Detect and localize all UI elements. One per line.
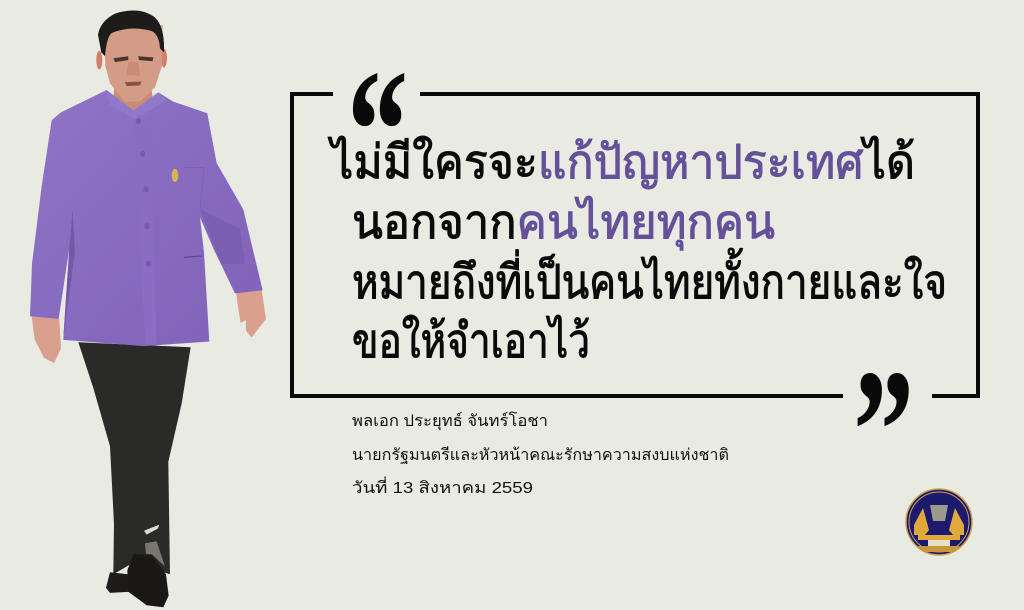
icon: government seal <box>906 489 972 555</box>
trousers and shoes <box>78 342 191 607</box>
jacket <box>30 90 263 346</box>
head <box>96 10 167 102</box>
right hand <box>236 289 266 338</box>
quote text <box>327 135 947 367</box>
quote line 1: ไม่มีใครจะแก้ปัญหาประเทศได้ <box>327 135 915 189</box>
quote line 4: ขอให้จำเอาไว้ <box>352 314 590 367</box>
closing quotation mark: ” <box>853 333 914 528</box>
speaker name: พลเอก ประยุทธ์ จันทร์โอชา <box>352 411 548 431</box>
quote frame <box>292 94 978 396</box>
speaker title: นายกรัฐมนตรีและหัวหน้าคณะรักษาความสงบแห่งชาติ <box>352 446 729 464</box>
gold pin <box>172 169 178 182</box>
attribution <box>352 411 729 497</box>
quote line 2: นอกจากคนไทยทุกคน <box>352 195 775 251</box>
jacket buttons <box>136 118 151 267</box>
left hand <box>32 316 61 363</box>
date: วันที่ 13 สิงหาคม 2559 <box>352 476 533 497</box>
figure: man in purple jacket walking <box>30 10 266 607</box>
neck <box>113 78 153 113</box>
opening quotation mark: “ <box>347 33 408 228</box>
